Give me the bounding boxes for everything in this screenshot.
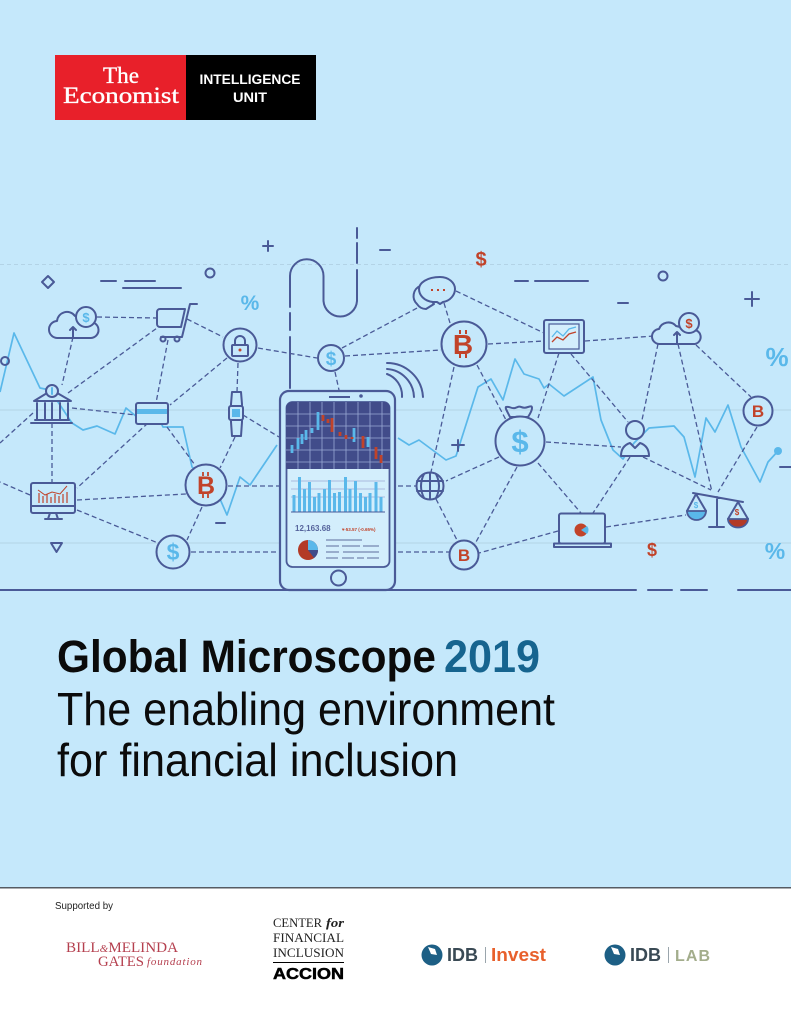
logo: Bill and Melinda Gates Foundation: BILL&MELINDA [66,940,178,956]
phone cable [290,228,357,388]
icon: dollar coin centre: $ [326,349,337,370]
icon: chat bubbles [414,277,455,309]
logo: Center for Financial Inclusion Accion: CENTER [273,916,323,930]
candlestick screen [286,402,390,469]
baseline [0,589,791,591]
subtitle [57,683,555,786]
subtitle: for financial inclusion [57,734,458,786]
icon: bitcoin left [186,464,226,506]
icon: shopping cart [157,304,197,342]
phone with trading app [280,391,395,590]
icon: money bag: $ [511,424,529,459]
logo: IDB Lab [604,944,710,966]
logo: Bill and Melinda Gates Foundation: foundation [147,956,202,968]
icon: bitcoin right [744,396,772,426]
decorative symbols: % [241,292,260,315]
icon: lock [224,328,256,362]
logo: Bill and Melinda Gates Foundation: GATES [98,954,144,970]
icon: money bag [496,406,544,466]
logo: Center for Financial Inclusion Accion [273,916,344,983]
logo: Center for Financial Inclusion Accion: INCLUSION [273,946,344,960]
icon: person [621,421,649,456]
subtitle: The enabling environment [57,683,555,735]
bar chart [291,477,385,512]
logo: Center for Financial Inclusion Accion: FINANCIAL [273,931,344,945]
icon: balance scales: $ [694,501,699,510]
decorative symbols: % [765,342,789,372]
icon: tablet chart [544,320,584,353]
logo: IDB Invest [422,944,546,966]
icon: dollar coin lower left [156,536,190,568]
index value: 12,163.68 [295,524,331,533]
icon: dollar coin lower left: $ [167,539,180,565]
network connections [0,291,757,553]
logo: The Economist Intelligence Unit [55,55,316,120]
icon: globe [416,472,444,500]
icon: bitcoin right: B [752,402,764,421]
icon: cloud with coin left [49,307,99,338]
decorative symbols: $ [475,249,487,271]
icon: cloud with coin left: $ [82,310,90,325]
icon: balance scales [687,493,748,528]
icon: bitcoin large: B [453,329,473,360]
icon: smartwatch [229,392,243,436]
text lines [326,540,379,558]
logo: IDB Invest: Invest [491,945,546,965]
icon: desktop monitor chart [31,483,75,519]
icon: dollar coin centre [318,345,344,371]
icon: bitcoin bottom [450,540,478,570]
title: 2019 [444,631,540,682]
footer panel [0,887,791,1024]
index change: ▾-53.57 (-0.65%) [341,527,376,532]
decorative symbols: % [765,538,785,564]
pie chart [298,540,318,560]
icon: bitcoin left: B [197,472,215,500]
icon: balance scales: $ [735,508,740,517]
icon: cloud with coin right: $ [685,316,693,331]
logo: The Economist Intelligence Unit: INTELLIGENCE [200,71,300,87]
logo: IDB Invest: IDB [447,945,478,965]
icon: laptop [554,514,611,547]
icon: cloud with coin right [652,313,701,344]
icon: credit card [136,403,168,424]
decorative symbols [1,241,791,564]
supported by: Supported by [55,901,113,912]
decorative symbols: $ [647,540,657,560]
logo: IDB Lab: LAB [675,948,710,965]
chart line: market trend [0,333,782,515]
logo: IDB Lab: IDB [630,945,661,965]
icon: bitcoin large [442,322,486,366]
wifi signal [387,363,423,397]
logo: The Economist Intelligence Unit: The [103,63,139,88]
logo: The Economist Intelligence Unit: Economist [63,83,180,108]
logo: The Economist Intelligence Unit: UNIT [233,89,267,105]
icon: bank [31,385,72,423]
logo: Center for Financial Inclusion Accion: ACCION [273,966,344,983]
title: Global Microscope [57,631,436,682]
logo: Bill and Melinda Gates Foundation [66,940,202,970]
logo: Center for Financial Inclusion Accion: for [326,916,344,930]
icon: bitcoin bottom: B [458,546,470,565]
